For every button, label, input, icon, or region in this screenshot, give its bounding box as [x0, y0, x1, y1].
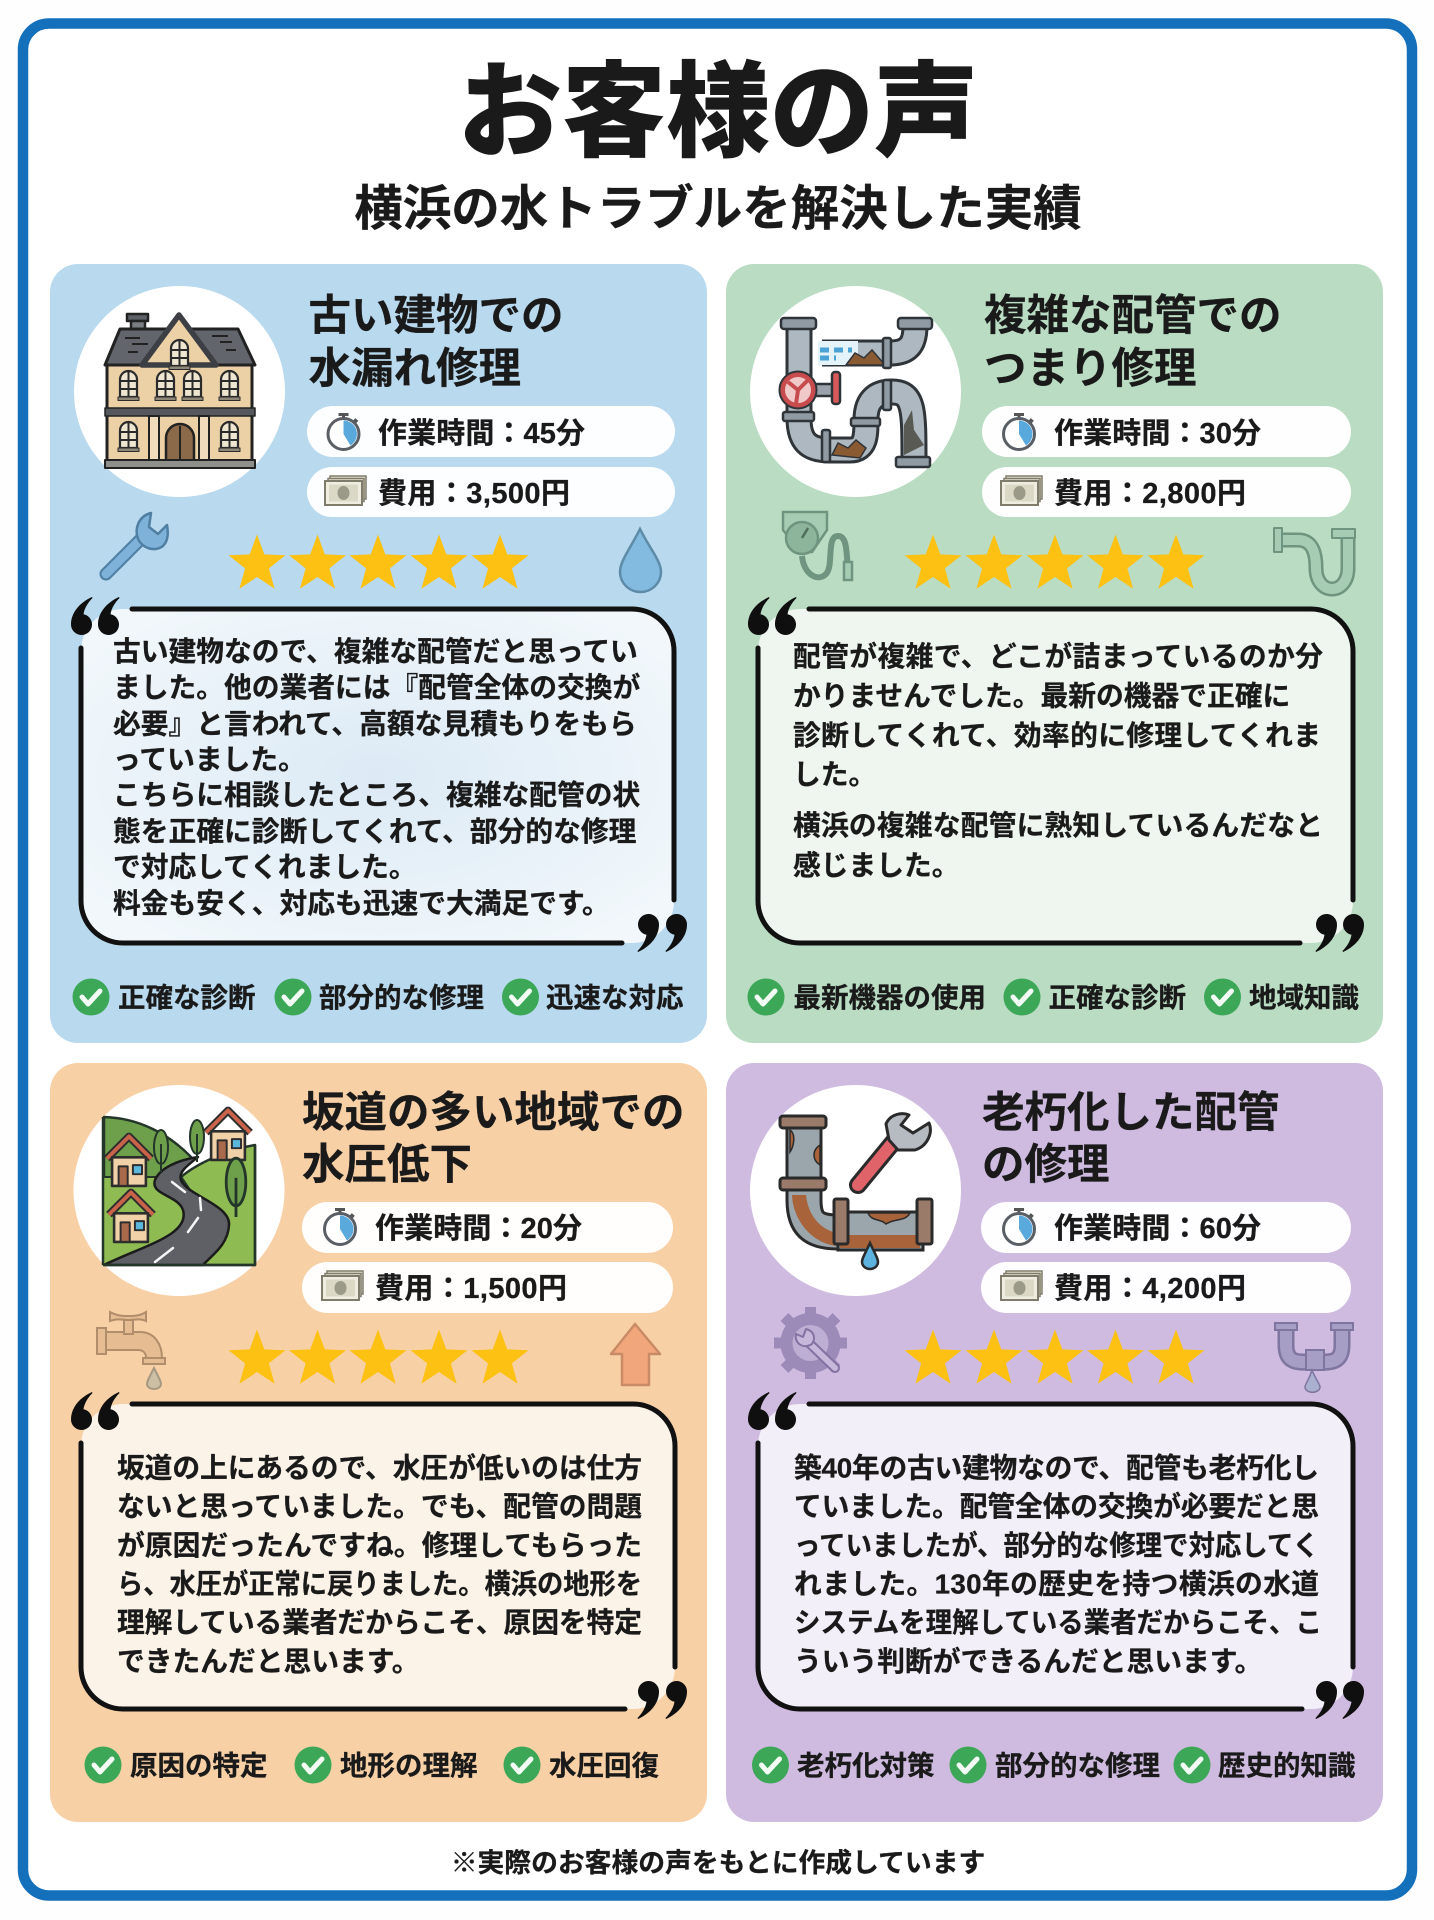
testimonial text: 築40年の古い建物なので、配管も老朽化し [794, 1452, 1319, 1484]
testimonial text [117, 1452, 642, 1677]
pill: work time [307, 406, 675, 457]
panel: low water pressure on slopes [50, 1063, 707, 1822]
opening quote mark [71, 597, 120, 635]
icon: old house [105, 314, 255, 468]
photo circle [750, 286, 961, 497]
icon: wrench [106, 513, 168, 574]
icon: leaking U pipe [1275, 1323, 1353, 1392]
pill: work time: 作業時間：45分 [378, 417, 585, 450]
tags [84, 1746, 659, 1784]
card heading: の修理 [982, 1142, 1110, 1189]
testimonial text: ました。他の業者には『配管全体の交換が [113, 672, 641, 703]
testimonial text: 配管が複雑で、どこが詰まっているのか分 [793, 641, 1323, 672]
tags: 部分的な修理 [319, 982, 484, 1013]
testimonial text: 古い建物なので、複雑な配管だと思ってい [113, 636, 638, 667]
opening quote mark [748, 1392, 796, 1430]
testimonial text [113, 636, 641, 919]
testimonial text: ないと思っていました。でも、配管の問題 [117, 1491, 642, 1522]
subtitle: 横浜の水トラブルを解決した実績 [354, 182, 1082, 236]
testimonial text: こちらに相談したところ、複雑な配管の状 [113, 780, 641, 810]
opening quote mark [71, 1392, 120, 1430]
five star rating [904, 1330, 1204, 1384]
icon: up arrow [611, 1324, 660, 1385]
pill: work time: 作業時間：20分 [375, 1212, 582, 1245]
pill: work time [302, 1202, 673, 1253]
panel background [726, 264, 1383, 1043]
tags: 原因の特定 [130, 1750, 268, 1781]
testimonial text: 横浜の複雑な配管に熟知しているんだなと [793, 810, 1323, 841]
card heading: 坂道の多い地域での [302, 1090, 685, 1137]
testimonial text: が原因だったんですね。修理してもらった [117, 1530, 642, 1561]
tags [752, 1746, 1356, 1784]
testimonial text: っていました。 [113, 744, 306, 775]
card heading: 老朽化した配管 [982, 1090, 1280, 1137]
pill: cost [307, 467, 675, 517]
speech box [748, 597, 1364, 952]
five star rating [904, 534, 1204, 589]
pill: cost [982, 467, 1351, 517]
panel background [50, 264, 707, 1043]
pill: work time [981, 1202, 1351, 1253]
closing quote mark [1316, 1681, 1364, 1719]
card heading [308, 293, 564, 393]
icon: hillside road and houses [103, 1110, 255, 1265]
card heading [982, 1090, 1280, 1189]
card heading: 複雑な配管での [984, 293, 1282, 340]
pill: cost: 費用：3,500円 [378, 477, 570, 510]
speech box [71, 1392, 687, 1719]
pill: cost [302, 1262, 673, 1313]
panel: old building water leak [50, 264, 707, 1043]
icon: water drop [620, 529, 661, 592]
panel: aging pipe repair [726, 1063, 1383, 1822]
testimonial text: ら、水圧が正常に戻りました。横浜の地形を [117, 1568, 642, 1600]
testimonial text [794, 1452, 1322, 1677]
card heading: 古い建物での [308, 293, 564, 340]
testimonial text: システムを理解している業者だからこそ、こ [794, 1607, 1322, 1638]
testimonial text: できたんだと思います。 [117, 1646, 419, 1677]
tags [748, 978, 1359, 1016]
pill: work time: 作業時間：60分 [1054, 1212, 1261, 1245]
title: お客様の声 [458, 55, 978, 171]
opening quote mark [748, 597, 796, 635]
tags: 老朽化対策 [797, 1750, 934, 1781]
testimonial text: 感じました。 [793, 850, 960, 881]
panel background [50, 1063, 707, 1822]
tags: 正確な診断 [118, 982, 256, 1013]
tags: 歴史的知識 [1218, 1750, 1356, 1781]
card heading [984, 293, 1282, 393]
footer note: ※実際のお客様の声をもとに作成しています [451, 1848, 985, 1878]
testimonial text: れました。130年の歴史を持つ横浜の水道 [794, 1568, 1319, 1600]
testimonial text: っていましたが、部分的な修理で対応してく [794, 1530, 1319, 1561]
tags: 地形の理解 [340, 1750, 478, 1781]
photo circle [750, 1085, 961, 1296]
testimonial text [793, 641, 1323, 881]
tags: 地域知識 [1249, 982, 1359, 1013]
card heading: つまり修理 [984, 346, 1197, 393]
pill: work time [982, 406, 1351, 457]
tags: 正確な診断 [1048, 982, 1186, 1013]
testimonial text: した。 [793, 759, 876, 790]
tags [72, 978, 684, 1016]
icon: faucet [97, 1312, 165, 1389]
testimonial text: ういう判断ができるんだと思います。 [794, 1646, 1262, 1677]
photo circle [74, 1085, 284, 1296]
card heading [302, 1090, 685, 1189]
card heading: 水圧低下 [302, 1142, 472, 1189]
testimonial text: ていました。配管全体の交換が必要だと思 [794, 1491, 1319, 1522]
pill: cost [981, 1262, 1351, 1313]
testimonial text: 診断してくれて、効率的に修理してくれま [793, 720, 1321, 751]
five star rating [228, 1330, 528, 1384]
tags: 最新機器の使用 [794, 982, 986, 1013]
testimonial text: で対応してくれました。 [113, 852, 417, 882]
testimonial text: 料金も安く、対応も迅速で大満足です。 [113, 888, 610, 919]
closing quote mark [1316, 914, 1364, 952]
icon: rusty pipe and wrench [780, 1114, 932, 1269]
five star rating [228, 534, 528, 589]
pill: cost: 費用：4,200円 [1054, 1272, 1246, 1305]
testimonial text: 坂道の上にあるので、水圧が低いのは仕方 [117, 1452, 642, 1484]
panel background [726, 1063, 1383, 1822]
tags: 迅速な対応 [546, 982, 684, 1013]
pill: cost: 費用：2,800円 [1054, 477, 1246, 510]
speech box [748, 1392, 1364, 1719]
icon: clogged pipes [780, 318, 932, 467]
testimonial text: 理解している業者だからこそ、原因を特定 [117, 1607, 642, 1638]
tags: 水圧回復 [549, 1750, 659, 1781]
card heading: 水漏れ修理 [308, 346, 521, 393]
speech box [71, 597, 687, 952]
testimonial text: かりませんでした。最新の機器で正確に [793, 680, 1290, 712]
pill: cost: 費用：1,500円 [375, 1272, 567, 1305]
testimonial text: 態を正確に診断してくれて、部分的な修理 [113, 816, 637, 847]
photo circle [74, 286, 285, 497]
icon: gear with wrench [774, 1307, 847, 1379]
pill: work time: 作業時間：30分 [1054, 417, 1261, 450]
icon: pressure gauge [783, 512, 852, 580]
tags: 部分的な修理 [995, 1750, 1160, 1781]
closing quote mark [638, 1681, 687, 1719]
panel: complex piping clog [726, 264, 1383, 1043]
icon: drain trap [1274, 528, 1355, 589]
closing quote mark [638, 914, 687, 952]
testimonial text: 必要』と言われて、高額な見積もりをもら [113, 708, 637, 740]
